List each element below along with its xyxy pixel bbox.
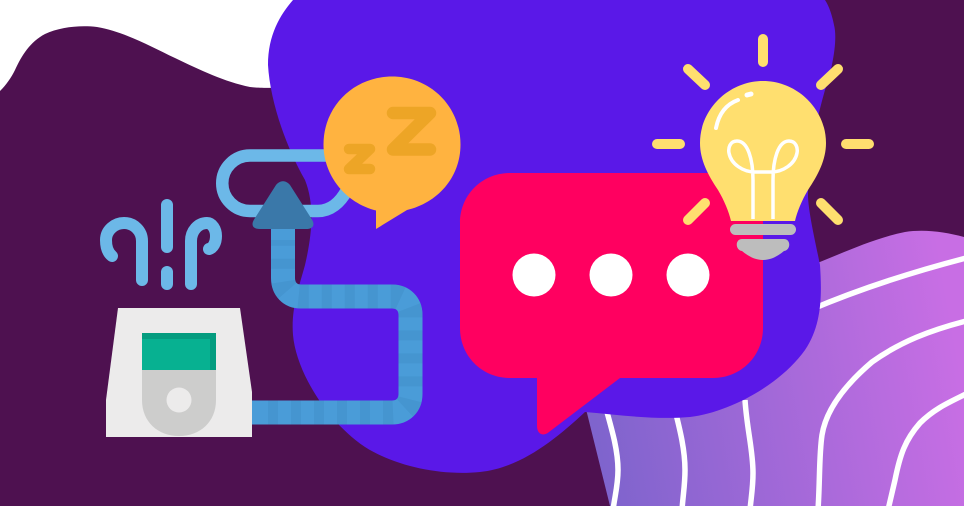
icon: CPAP mask loop xyxy=(222,156,347,211)
icon: light bulb xyxy=(657,39,869,260)
dot one xyxy=(512,254,556,296)
large Z xyxy=(393,113,430,150)
icon: CPAP machine xyxy=(106,308,252,437)
bulb highlights xyxy=(716,100,738,128)
icon: air tube xyxy=(250,225,410,412)
background: pink-lilac striped shape xyxy=(580,225,964,506)
small Z xyxy=(349,149,370,169)
bulb rays xyxy=(657,39,869,220)
icon: mask nose arrow xyxy=(253,181,313,229)
icon: air vapor xyxy=(106,205,216,284)
machine screen xyxy=(142,333,216,370)
machine dial xyxy=(166,388,192,412)
bulb glass xyxy=(700,81,826,221)
background: violet blob xyxy=(268,0,835,473)
bulb filament xyxy=(729,141,797,219)
dot two xyxy=(590,254,632,296)
icon: sleep bubble xyxy=(324,76,460,229)
dot three xyxy=(666,254,710,296)
machine control panel xyxy=(142,370,216,436)
bulb base xyxy=(730,224,796,235)
icon: speech bubble with dots xyxy=(460,173,763,434)
